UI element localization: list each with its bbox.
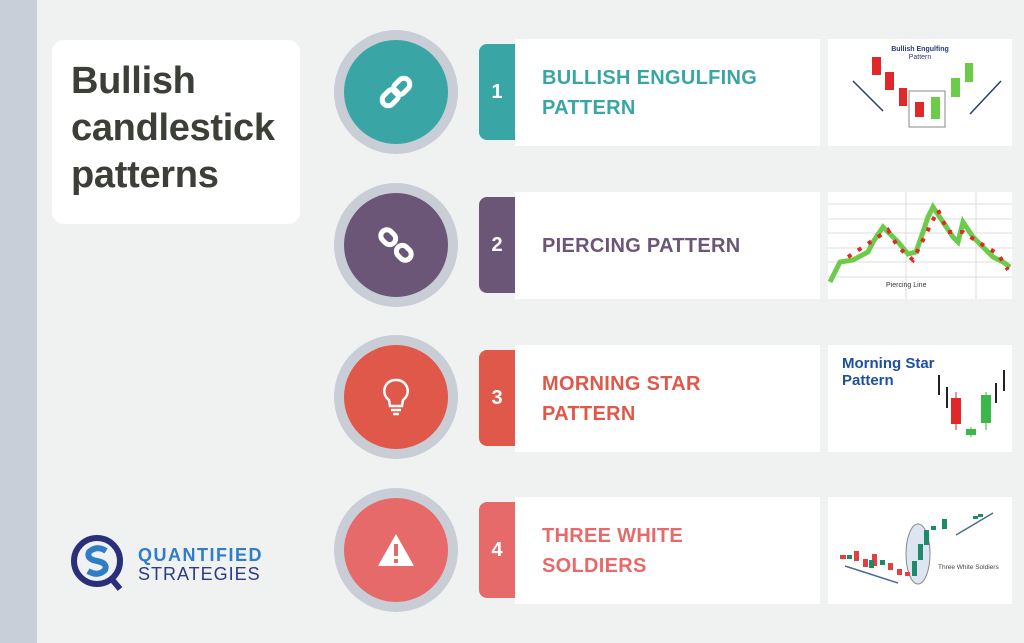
row 4 label: SOLDIERS: [542, 554, 647, 576]
row 2 chart: [828, 192, 1012, 299]
sidebar strip: [0, 0, 37, 643]
row 1 label: [515, 39, 820, 146]
row 2 chart: Piercing Line: [886, 282, 927, 289]
row 3 number: [479, 350, 515, 446]
row 3 chart: [828, 345, 1012, 452]
row 4 chart: [828, 497, 1012, 604]
row 1 label: PATTERN: [542, 96, 636, 118]
logo: STRATEGIES: [138, 564, 261, 584]
row 1 label: BULLISH ENGULFING: [542, 66, 757, 88]
row 3 chart: Morning Star: [842, 355, 935, 372]
row 4 icon: [334, 488, 458, 612]
row 2 label: [515, 192, 820, 299]
title: Bullish candlestick patterns: [71, 60, 275, 196]
row 1 number: [479, 44, 515, 140]
row 2 number: 2: [491, 234, 503, 256]
row 1 chart: [828, 39, 1012, 146]
row 4 number: [479, 502, 515, 598]
row 2 icon: [334, 183, 458, 307]
row 1 icon: [334, 30, 458, 154]
row 3 label: PATTERN: [542, 402, 636, 424]
logo: [71, 535, 263, 591]
row 2 number: [479, 197, 515, 293]
row 2 label: PIERCING PATTERN: [542, 234, 741, 256]
row 3 label: MORNING STAR: [542, 372, 701, 394]
row 3 icon: [334, 335, 458, 459]
row 1 chart: Bullish Engulfing: [891, 46, 949, 53]
row 3 label: [515, 345, 820, 452]
row 4 label: THREE WHITE: [542, 524, 683, 546]
row 3 chart: Pattern: [842, 372, 894, 389]
row 4 chart: Three White Soldiers: [938, 564, 999, 571]
title: [52, 40, 300, 224]
logo: QUANTIFIED: [138, 545, 263, 565]
row 4 label: [515, 497, 820, 604]
row 1 number: 1: [491, 80, 503, 102]
row 3 number: 3: [491, 386, 503, 408]
row 4 number: 4: [491, 538, 503, 560]
row 1 chart: Pattern: [909, 54, 931, 61]
